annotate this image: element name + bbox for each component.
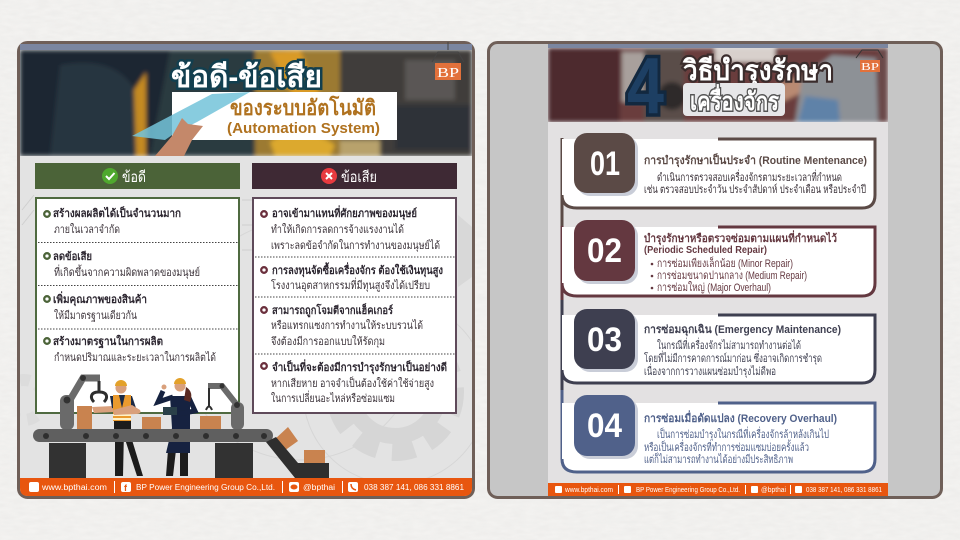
spine lines	[560, 138, 564, 460]
card 02: periodic scheduled repair: การซ่อมเพียงเล็กน้อย (Minor Repair)	[657, 256, 793, 270]
pros heading: ข้อดี	[122, 169, 146, 186]
footer: contacts: @bpthai	[761, 487, 786, 494]
icon: facebook	[624, 486, 631, 493]
number badge 01	[574, 133, 635, 193]
pros list: ให้มีมาตรฐานเดียวกัน	[54, 309, 137, 322]
cons list: การลงทุนจัดซื้อเครื่องจักร ต้องใช้เงินทุนสูง	[272, 262, 443, 278]
bullet icons	[44, 211, 50, 344]
cons list: โรงงานอุตสาหกรรมที่มีทุนสูงจึงได้เปรียบ	[271, 277, 430, 292]
bullet icons	[261, 211, 267, 369]
card 02: periodic scheduled repair: (Periodic Scheduled Repair)	[644, 245, 767, 256]
card 04: recovery overhaul	[562, 395, 875, 472]
icon: line	[289, 482, 299, 492]
footer: contacts: 038 387 141, 086 331 8861	[364, 483, 465, 492]
number badge 01: 01	[590, 145, 620, 183]
subtitle box: (Automation System)	[227, 120, 380, 137]
footer: contacts: 038 387 141, 086 331 8861	[806, 487, 882, 494]
icon: facebook: f	[124, 483, 128, 493]
card 01: routine maintenance: การบำรุงรักษาเป็นประจำ (Routine Mentenance)	[644, 153, 867, 168]
cons list: สามารถถูกโจมตีจากแฮ็คเกอร์	[272, 303, 393, 318]
cons heading: ข้อเสีย	[341, 169, 377, 186]
header photo	[20, 50, 472, 156]
icon: web	[29, 482, 39, 492]
icon: cross	[321, 168, 337, 184]
cons list: เพราะลดข้อจำกัดในการทำงานของมนุษย์ได้	[271, 239, 440, 252]
icon: phone	[795, 486, 802, 493]
card 01: routine maintenance: เช่น ตรวจสอบประจำวัน ประจำสัปดาห์ ประจำเดือน หรือประจำปี	[644, 183, 866, 196]
title: pros and cons: ข้อดี-ข้อเสีย	[171, 61, 322, 94]
footer: contacts: BP Power Engineering Group Co.,Ltd.	[636, 487, 740, 494]
footer: contacts	[20, 478, 472, 496]
subtitle box: ของระบบอัตโนมัติ	[230, 95, 376, 120]
footer: contacts: BP Power Engineering Group Co.,Ltd.	[136, 483, 275, 492]
card 01: routine maintenance: ดำเนินการตรวจสอบเครื่องจักรตามระยะเวลาที่กำหนด	[657, 169, 842, 184]
pros list: ลดข้อเสีย	[53, 250, 92, 263]
BP logo	[856, 50, 883, 73]
tablet held in hand	[132, 92, 250, 156]
pros heading	[35, 163, 240, 189]
subtitle box	[172, 92, 397, 140]
BP logo	[432, 42, 464, 81]
card 03: emergency maintenance	[562, 309, 875, 383]
pros list	[36, 198, 239, 413]
cons list: หากเสียหาย อาจจำเป็นต้องใช้ค่าใช้จ่ายสูง	[271, 376, 434, 390]
number badge 03	[574, 309, 635, 369]
card 04: recovery overhaul: เป็นการซ่อมบำรุงในกรณีที่เครื่องจักรล้าหลังเกินไป	[657, 426, 829, 441]
cons heading	[252, 163, 457, 189]
pros list: สร้างมาตรฐานในการผลิต	[53, 334, 163, 349]
icon: facebook	[121, 482, 131, 493]
boxes	[77, 406, 325, 463]
BP logo: BP	[861, 61, 879, 73]
worker: woman	[158, 378, 195, 476]
footer: contacts: www.bpthai.com	[41, 483, 107, 492]
worker: man	[92, 380, 143, 476]
card 03: emergency maintenance: เนื่องจากการวางแผนซ่อมบำรุงไม่ดีพอ	[644, 363, 776, 378]
footer: contacts: www.bpthai.com	[564, 487, 613, 494]
card 03: emergency maintenance: การซ่อมฉุกเฉิน (Emergency Maintenance)	[644, 323, 841, 337]
card 03: emergency maintenance: ในกรณีที่เครื่องจักรไม่สามารถทำงานต่อได้	[657, 337, 801, 352]
card 01: routine maintenance	[562, 133, 875, 208]
pros list: ที่เกิดขึ้นจากความผิดพลาดของมนุษย์	[54, 264, 200, 279]
right robot arm	[206, 384, 244, 430]
cons list: ทำให้เกิดการลดการจ้างแรงงานได้	[271, 223, 404, 236]
number badge 03: 03	[587, 321, 622, 359]
footer: contacts: @bpthai	[303, 483, 335, 492]
card 02: periodic scheduled repair: บำรุงรักษาหรือตรวจซ่อมตามแผนที่กำหนดไว้	[644, 230, 837, 246]
panel: four machine maintenance methods	[488, 41, 942, 498]
card 03: emergency maintenance: โดยที่ไม่มีการคาดการณ์มาก่อน ซึ่งอาจเกิดการชำรุด	[644, 350, 822, 365]
number badge 02	[574, 220, 635, 281]
illustration: factory conveyor with workers	[33, 375, 329, 478]
card 02: periodic scheduled repair	[562, 220, 875, 296]
cons list	[253, 198, 456, 413]
gear watermark	[4, 195, 487, 484]
pros list: กำหนดปริมาณและระยะเวลาในการผลิตได้	[54, 351, 216, 364]
card 04: recovery overhaul: การซ่อมเมื่อดัดแปลง (Recovery Overhaul)	[644, 410, 837, 425]
icon: phone	[348, 482, 358, 492]
cons list: อาจเข้ามาแทนที่ศักยภาพของมนุษย์	[272, 205, 417, 221]
pros list: ภายในเวลาจำกัด	[54, 223, 120, 236]
number badge 02: 02	[587, 232, 622, 270]
icon: line	[751, 486, 758, 493]
subtitle box: machinery: เครื่องจักร	[690, 84, 779, 116]
card 04: recovery overhaul: แต่ก็ไม่สามารถทำงานได้อย่างมีประสิทธิภาพ	[644, 452, 793, 466]
big numeral 4: 4	[627, 41, 664, 130]
card 04: recovery overhaul: หรือเป็นเครื่องจักรที่ทำการซ่อมแซมบ่อยครั้งแล้ว	[644, 439, 809, 454]
left robot arm	[60, 375, 107, 430]
cons list: จึงต้องมีการออกแบบให้รัดกุม	[271, 335, 385, 348]
number badge 04: 04	[587, 407, 622, 445]
card 02: periodic scheduled repair: การซ่อมใหญ่ (Major Overhaul)	[657, 281, 771, 294]
cons list: หรือแทรกแซงการทำงานให้ระบบรวนได้	[271, 319, 423, 332]
card 02: periodic scheduled repair: การซ่อมขนาดปานกลาง (Medium Repair)	[657, 270, 807, 282]
pros list: สร้างผลผลิตได้เป็นจำนวนมาก	[53, 206, 181, 220]
header photo	[548, 48, 888, 122]
BP logo: BP	[437, 66, 459, 81]
title: maintenance methods: วิธีบำรุงรักษา	[682, 55, 833, 88]
pros list: เพิ่มคุณภาพของสินค้า	[53, 291, 147, 307]
icon: check	[102, 168, 118, 184]
cons list: ในการเปลี่ยนอะไหล่หรือซ่อมแซม	[271, 390, 395, 405]
panel: automation pros and cons	[4, 42, 487, 498]
cons list: จำเป็นที่จะต้องมีการบำรุงรักษาเป็นอย่างดี	[272, 359, 447, 375]
conveyor belt	[33, 429, 329, 478]
footer: contacts	[548, 483, 888, 496]
icon: web	[555, 486, 562, 493]
number badge 04	[574, 395, 635, 456]
